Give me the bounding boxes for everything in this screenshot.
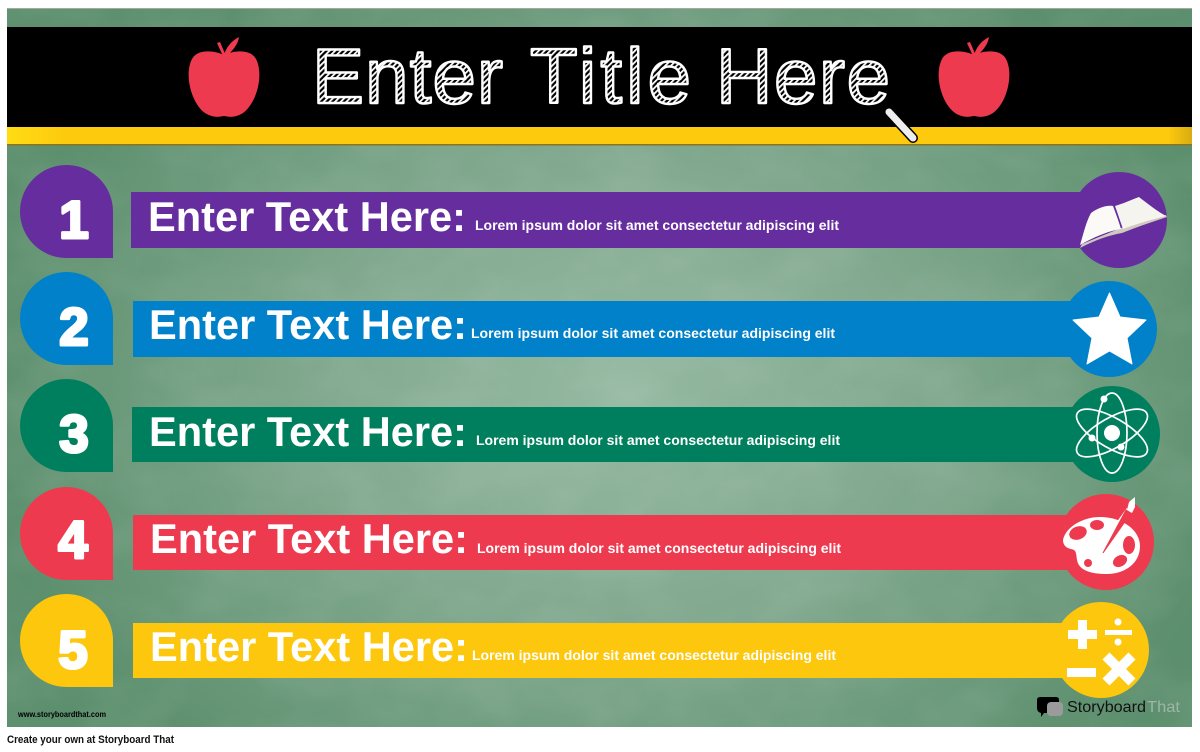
icon: paint palette [1058, 494, 1154, 590]
number badge 4: 4 [58, 511, 88, 570]
bar 5: Lorem ipsum dolor sit amet consectetur adipiscing elit [472, 647, 836, 663]
bar 4: Enter Text Here: [150, 515, 468, 562]
title banner [7, 27, 1192, 146]
bar 1: Enter Text Here: [148, 193, 466, 240]
bar 3: Enter Text Here: [149, 408, 467, 455]
row 3: green [20, 379, 1160, 482]
icon: open book [1071, 172, 1167, 268]
row 4: red [20, 487, 1154, 590]
number badge 1: 1 [59, 191, 89, 250]
bar 4 [133, 515, 1078, 570]
number badge 5 [20, 594, 113, 687]
bar 2 [133, 301, 1083, 357]
icon: star [1061, 281, 1157, 377]
Storyboard That logo: That [1147, 699, 1181, 716]
bar 3 [132, 407, 1087, 462]
number badge 2: 2 [59, 298, 89, 357]
bar 2: Enter Text Here: [149, 301, 467, 348]
number badge 2 [20, 272, 113, 365]
number badge 3 [20, 379, 113, 472]
Storyboard That logo [1037, 697, 1181, 717]
bar 1 [131, 192, 1096, 248]
website watermark: www.storyboardthat.com [17, 710, 106, 719]
row 2: blue [20, 272, 1157, 377]
title: Here [716, 32, 890, 120]
icon: right apple [939, 37, 1009, 117]
icon: chalk [889, 112, 913, 138]
row 5: yellow [20, 594, 1149, 698]
title [312, 32, 890, 120]
number badge 1 [20, 165, 113, 258]
row 1: purple [20, 165, 1167, 268]
number badge 3: 3 [59, 405, 89, 464]
footer credit: Create your own at Storyboard That [7, 734, 174, 746]
number badge 5: 5 [58, 621, 88, 680]
icon: speech bubbles [1037, 697, 1063, 717]
icon: math symbols [1053, 602, 1149, 698]
Storyboard That logo: Storyboard [1067, 699, 1146, 716]
title: Title [530, 32, 691, 120]
bar 3: Lorem ipsum dolor sit amet consectetur adipiscing elit [476, 432, 840, 448]
bar 4: Lorem ipsum dolor sit amet consectetur adipiscing elit [477, 540, 841, 556]
icon: left apple [189, 37, 259, 117]
bar 5 [133, 623, 1073, 678]
title: Enter [312, 32, 503, 120]
number badge 4 [20, 487, 113, 580]
bar 2: Lorem ipsum dolor sit amet consectetur adipiscing elit [471, 325, 835, 341]
bar 1: Lorem ipsum dolor sit amet consectetur adipiscing elit [475, 217, 839, 233]
bar 5: Enter Text Here: [150, 623, 468, 670]
icon: atom [1064, 386, 1160, 482]
